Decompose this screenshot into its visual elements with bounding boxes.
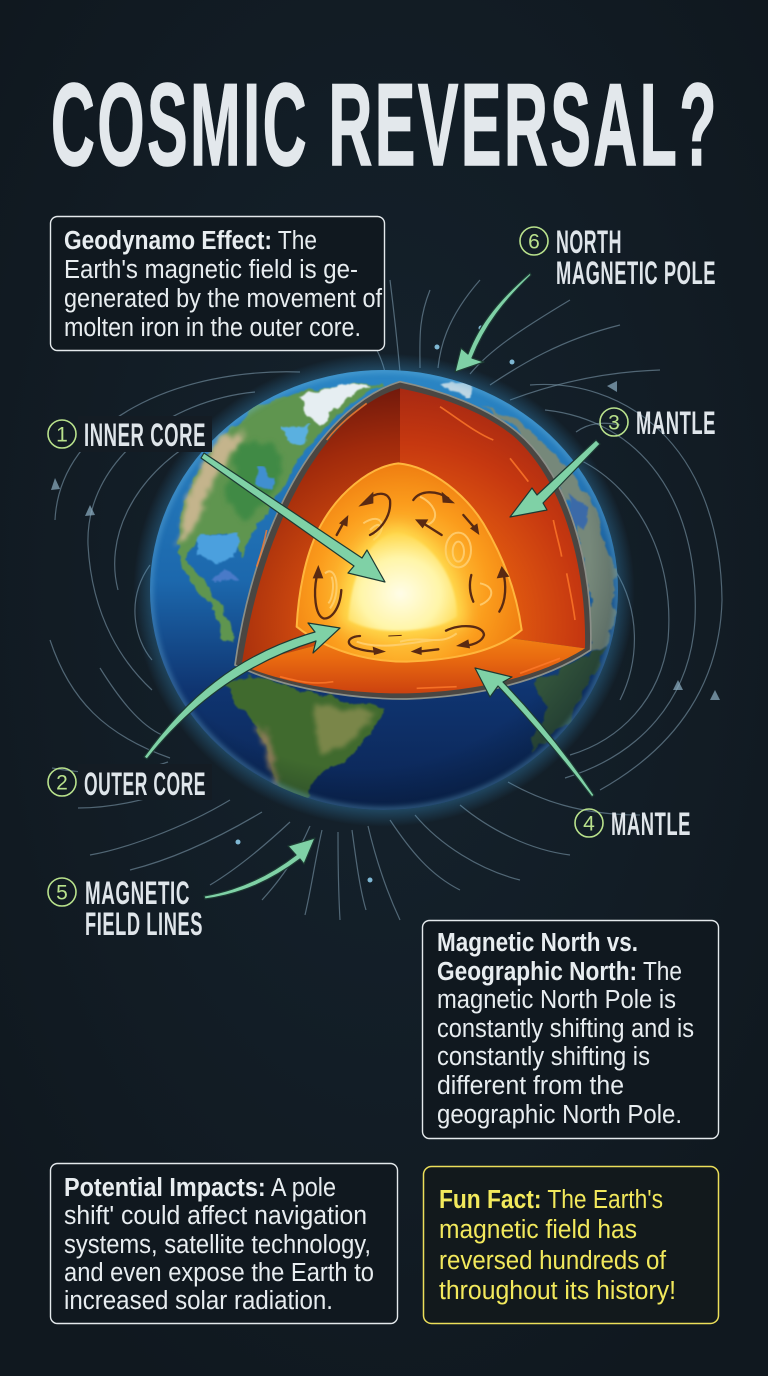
label 4: mantle: MANTLE (611, 806, 691, 842)
left face: mantle (242, 388, 400, 665)
bottom face: mantle (242, 623, 585, 693)
inner core glow (340, 527, 465, 633)
info box: magnetic vs geographic north: magnetic North Pole is (437, 986, 676, 1014)
arrow: field lines (204, 838, 315, 899)
label 4: mantle: 4 (583, 812, 595, 836)
globe shading (244, 490, 618, 810)
info box: potential impacts: increased solar radiation. (64, 1287, 333, 1315)
info box: fun fact: reversed hundreds of (439, 1247, 667, 1275)
right face: mantle (400, 388, 585, 648)
label 1: inner core (48, 416, 212, 453)
info box: magnetic vs geographic north: Geographic North: The (437, 958, 682, 986)
south america (225, 672, 385, 798)
info box: geodynamo effect: molten iron in the outer core. (64, 314, 361, 342)
convection arrows (313, 492, 509, 655)
info box: magnetic vs geographic north (422, 920, 718, 1138)
label 3: mantle (600, 405, 716, 441)
label 6: north magnetic pole: 6 (528, 230, 540, 254)
lava streaks (257, 403, 575, 688)
arrow: north pole (455, 273, 531, 372)
north america (177, 383, 380, 643)
arrow: outer core (144, 623, 340, 759)
info box: magnetic vs geographic north: constantly shifting and is (437, 1015, 694, 1043)
info box: magnetic vs geographic north: geographic North Pole. (437, 1101, 682, 1129)
label 4: mantle (575, 806, 691, 842)
arrow: mantle 4 (475, 668, 594, 797)
label 5: magnetic field lines: 5 (56, 882, 68, 904)
info box: fun fact: Fun Fact: The Earth's (439, 1186, 663, 1214)
info box: potential impacts: shift' could affect navigation (64, 1202, 367, 1230)
label 1: inner core: 1 (56, 424, 68, 446)
label 2: outer core: OUTER CORE (84, 766, 206, 802)
label 3: mantle: 3 (608, 412, 620, 434)
africa and europe limb (440, 380, 617, 753)
info box: potential impacts: Potential Impacts: A pole (64, 1174, 336, 1202)
cutaway wedge (235, 382, 591, 699)
swirl textures (325, 497, 491, 646)
label 6: north magnetic pole (520, 224, 716, 291)
info box: magnetic vs geographic north: Magnetic North vs. (437, 929, 638, 957)
info box: magnetic vs geographic north: constantly shifting is (437, 1043, 650, 1071)
label 2: outer core (48, 764, 212, 802)
label 2: outer core: 2 (56, 772, 68, 794)
info box: geodynamo effect: generated by the movement of (64, 285, 383, 313)
info box: fun fact: magnetic field has (439, 1216, 637, 1244)
label 5: magnetic field lines: FIELD LINES (85, 906, 203, 942)
globe surface (140, 360, 630, 823)
info box: potential impacts: and even expose the Earth to (64, 1259, 374, 1287)
info box: fun fact: throughout its history! (439, 1277, 676, 1305)
info box: geodynamo effect (50, 216, 384, 350)
limb highlight (150, 370, 618, 810)
info box: magnetic vs geographic north: different from the (437, 1072, 624, 1100)
label 1: inner core: INNER CORE (84, 417, 206, 453)
info box: potential impacts: systems, satellite technology, (64, 1231, 371, 1259)
info box: geodynamo effect: Geodynamo Effect: The (64, 227, 317, 255)
info box: fun fact (424, 1166, 718, 1324)
info box: potential impacts (50, 1164, 398, 1324)
earth globe with cutaway (133, 353, 635, 827)
label 5: magnetic field lines (48, 875, 203, 942)
info box: geodynamo effect: Earth's magnetic field is ge- (64, 256, 358, 284)
label 5: magnetic field lines: MAGNETIC (85, 875, 190, 911)
outer core (297, 463, 522, 662)
atmospheric glow (133, 353, 635, 827)
magnetic field lines (50, 280, 722, 920)
arrow: inner core (201, 453, 385, 582)
wedge rim (235, 382, 591, 699)
label 6: north magnetic pole: NORTH (556, 224, 622, 260)
arrow: mantle 3 (510, 440, 600, 517)
inner core (348, 533, 457, 631)
